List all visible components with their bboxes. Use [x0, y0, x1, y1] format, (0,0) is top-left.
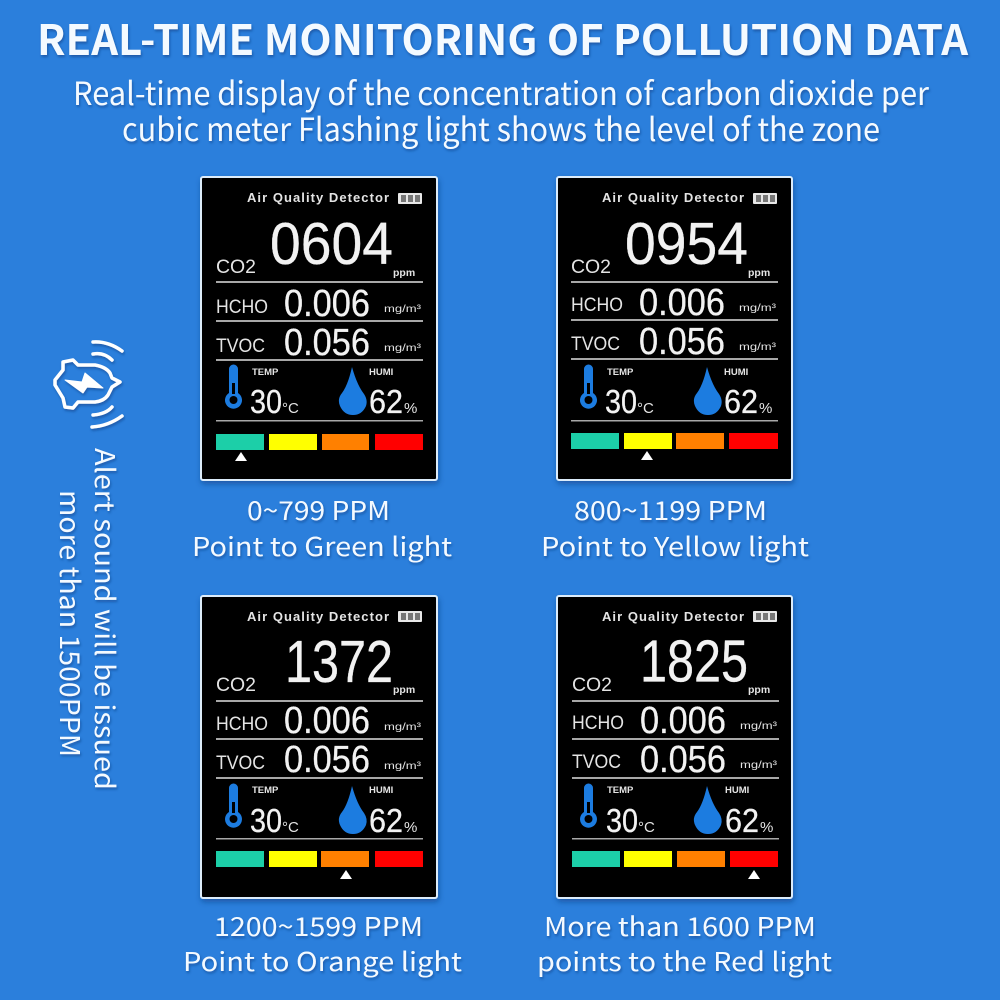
caption: red — [537, 907, 832, 979]
panel: detector yellow: °C — [637, 400, 654, 417]
panel: detector green: CO2 — [216, 257, 256, 278]
caption: yellow: 800~1199 PPM — [574, 491, 767, 528]
panel: detector red: % — [760, 819, 773, 836]
panel: detector red: mg/m³ — [740, 720, 778, 732]
panel: detector orange: mg/m³ — [384, 760, 422, 772]
panel: detector yellow: 62 — [724, 383, 758, 420]
panel: detector green: HCHO — [216, 297, 268, 318]
icon: alert bell — [55, 342, 122, 427]
panel: detector orange: 62 — [369, 802, 403, 839]
caption: green: 0~799 PPM — [247, 491, 390, 528]
panel: detector green: 0.056 — [284, 322, 370, 364]
panel: detector orange: 30 — [250, 802, 282, 839]
caption: orange: 1200~1599 PPM — [214, 907, 423, 944]
panel: detector yellow: 0.056 — [639, 321, 725, 363]
panel: detector red: TVOC — [572, 752, 621, 773]
panel: detector yellow: mg/m³ — [739, 341, 777, 353]
panel: detector red: CO2 — [572, 675, 612, 696]
panel: detector yellow: % — [759, 400, 772, 417]
panel: detector orange: HCHO — [216, 714, 268, 735]
panel: detector yellow — [557, 177, 792, 480]
vertical alert text — [52, 448, 126, 790]
panel: detector red: °C — [638, 819, 655, 836]
panel: detector red: 62 — [725, 802, 759, 839]
panel: detector yellow: mg/m³ — [739, 302, 777, 314]
subtitle — [73, 69, 930, 151]
panel: detector yellow: 0.006 — [639, 282, 725, 324]
panel: detector yellow: ppm — [748, 267, 770, 279]
panel: detector orange: 0.006 — [284, 700, 370, 742]
panel: detector green — [201, 177, 437, 480]
panel: detector yellow: HCHO — [571, 295, 623, 316]
panel: detector yellow: HUMI — [724, 367, 748, 378]
caption: red: More than 1600 PPM — [544, 907, 816, 944]
panel: detector red: mg/m³ — [740, 759, 778, 771]
panel: detector green: 0.006 — [284, 283, 370, 325]
panel: detector green: 62 — [369, 383, 403, 420]
panel: detector green: HUMI — [369, 367, 393, 378]
caption: green: Point to Green light — [192, 527, 452, 564]
vertical alert text: Alert sound will be issued — [87, 448, 126, 790]
title: REAL-TIME MONITORING OF POLLUTION DATA — [37, 7, 969, 68]
panel: detector red: 0.056 — [640, 739, 726, 781]
panel: detector green: 0604 — [270, 211, 393, 277]
panel: detector yellow: TEMP — [607, 367, 634, 378]
panel: detector yellow: 30 — [605, 383, 637, 420]
panel: detector orange: mg/m³ — [384, 721, 422, 733]
panel: detector red: 30 — [606, 802, 638, 839]
panel: detector orange: ppm — [393, 684, 415, 696]
panel: detector orange: TVOC — [216, 753, 265, 774]
panel: detector orange: % — [404, 819, 417, 836]
panel: detector red: 0.006 — [640, 700, 726, 742]
panel: detector orange — [201, 596, 437, 898]
panel: detector orange: 0.056 — [284, 739, 370, 781]
subtitle: Real-time display of the concentration of carbon dioxide per — [73, 69, 930, 115]
panel: detector green: ppm — [393, 267, 415, 279]
panel: detector yellow: 0954 — [625, 211, 748, 277]
panel: detector orange: 1372 — [285, 629, 393, 695]
panel: detector orange: CO2 — [216, 675, 256, 696]
panel: detector orange: TEMP — [252, 785, 279, 796]
panel: detector green: 30 — [250, 383, 282, 420]
caption: yellow: Point to Yellow light — [541, 527, 809, 564]
panel: detector yellow: TVOC — [571, 334, 620, 355]
panel: detector red: HUMI — [725, 785, 749, 796]
vertical alert text: more than 1500PPM — [52, 490, 91, 757]
panel: detector green: mg/m³ — [384, 342, 422, 354]
caption: green — [192, 491, 452, 564]
panel: detector orange: Air Quality Detector — [247, 609, 389, 624]
panel: detector red: Air Quality Detector — [602, 609, 744, 624]
panel: detector red — [557, 596, 792, 898]
panel: detector green: °C — [282, 400, 299, 417]
panel: detector green: TVOC — [216, 336, 265, 357]
panel: detector yellow: Air Quality Detector — [602, 190, 744, 205]
caption: red: points to the Red light — [537, 942, 832, 979]
panel: detector green: % — [404, 400, 417, 417]
panel: detector yellow: CO2 — [571, 257, 611, 278]
panel: detector green: TEMP — [252, 367, 279, 378]
panel: detector orange: HUMI — [369, 785, 393, 796]
caption: orange: Point to Orange light — [183, 942, 462, 979]
caption: yellow — [541, 491, 809, 564]
subtitle: cubic meter Flashing light shows the level of the zone — [122, 105, 880, 151]
panel: detector red: HCHO — [572, 713, 624, 734]
panel: detector green: Air Quality Detector — [247, 190, 389, 205]
panel: detector orange: °C — [282, 819, 299, 836]
panel: detector red: TEMP — [607, 785, 634, 796]
panel: detector red: 1825 — [640, 628, 748, 694]
caption: orange — [183, 907, 462, 979]
panel: detector green: mg/m³ — [384, 303, 422, 315]
panel: detector red: ppm — [748, 684, 770, 696]
